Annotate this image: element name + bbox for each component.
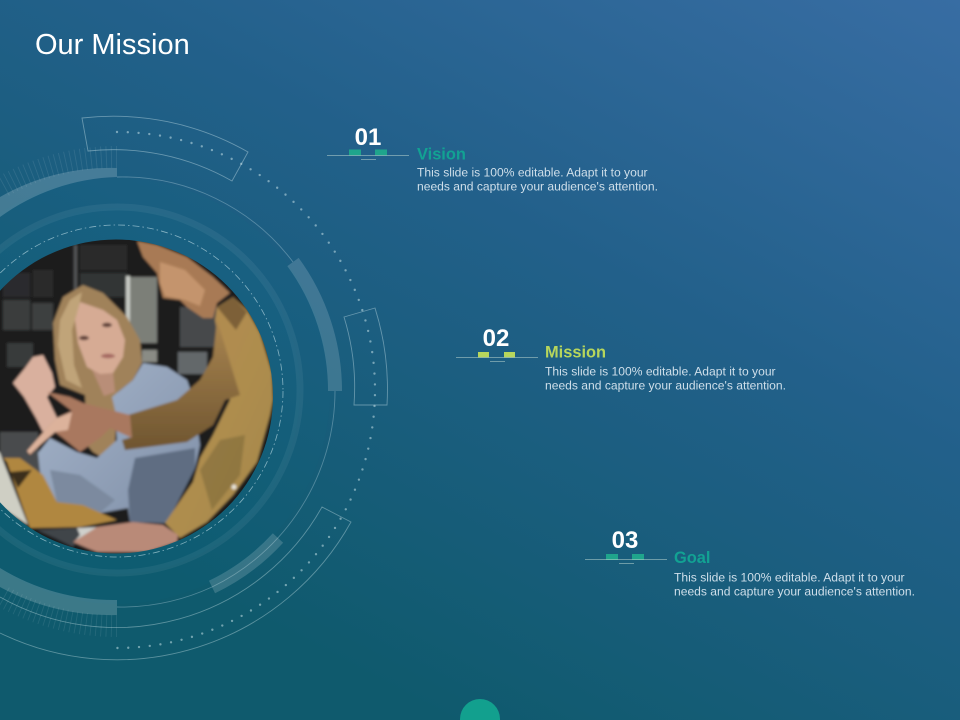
photo: table <box>3 458 117 528</box>
photo: woman's hair <box>53 285 142 458</box>
ring: bracket top <box>82 116 248 181</box>
ring: dotted arc <box>117 132 375 648</box>
photo: woman's eyes and lips <box>79 323 115 358</box>
photo: table shadow <box>10 470 32 488</box>
ring: bracket bottom <box>0 507 351 660</box>
photo: shirt button <box>232 484 236 490</box>
divider icon 01 <box>327 150 409 160</box>
photo: hand highlight <box>27 412 72 454</box>
photo: laptop <box>0 448 28 525</box>
photo: woman's raised hand <box>13 355 58 432</box>
photo: man's head <box>137 241 230 318</box>
photo: hair highlight <box>58 292 82 388</box>
photo: keyboard <box>37 528 80 547</box>
ring: thick arc segments <box>0 168 117 615</box>
ring: dashed ring <box>0 225 283 557</box>
heading mission: Mission <box>545 344 606 362</box>
ring: inner tinted discs <box>0 178 330 604</box>
photo: woman's face <box>75 302 125 374</box>
photo: woman's neck <box>92 370 116 396</box>
text mission: This slide is 100% editable. Adapt it to your <box>545 364 776 378</box>
photo: man's hand <box>27 392 132 455</box>
number 01: 01 <box>355 124 381 151</box>
photo: shirt shadow <box>200 435 245 510</box>
photo: sweater fold <box>50 470 115 513</box>
item 02: mission <box>456 325 786 392</box>
photo: woman's sweater <box>38 363 200 523</box>
ring: thick translucent ring <box>0 207 300 573</box>
radial ring graphic <box>0 116 387 660</box>
title: Our Mission <box>35 29 190 61</box>
photo: laptop deck <box>75 527 100 541</box>
photo: dark window backdrop <box>0 235 285 555</box>
bottom teal circle <box>460 699 500 720</box>
divider icon 03 <box>585 554 667 564</box>
divider icon 02 <box>456 352 538 362</box>
ring: radial ticks <box>0 157 117 626</box>
number 02: 02 <box>483 325 509 352</box>
photo: man's lower hand <box>73 522 178 552</box>
text goal: This slide is 100% editable. Adapt it to your <box>674 570 905 584</box>
number 03: 03 <box>612 527 638 554</box>
text vision: needs and capture your audience's attention. <box>417 180 658 194</box>
ring: bracket right <box>344 308 387 405</box>
photo: two colleagues at a laptop <box>0 235 285 555</box>
text vision: This slide is 100% editable. Adapt it to your <box>417 166 648 180</box>
photo: man's torso <box>165 297 273 538</box>
photo: shirt collar <box>217 297 247 330</box>
item 03: goal <box>585 527 915 598</box>
photo: sweater shadow <box>128 448 195 523</box>
photo: man's face highlight <box>160 262 205 306</box>
text goal: needs and capture your audience's attention. <box>674 584 915 598</box>
text mission: needs and capture your audience's attention. <box>545 378 786 392</box>
heading vision: Vision <box>417 146 466 164</box>
heading goal: Goal <box>674 549 710 567</box>
photo: man's sleeve <box>122 320 240 450</box>
item 01: vision <box>327 124 658 194</box>
ring: thin circle line <box>117 177 335 607</box>
